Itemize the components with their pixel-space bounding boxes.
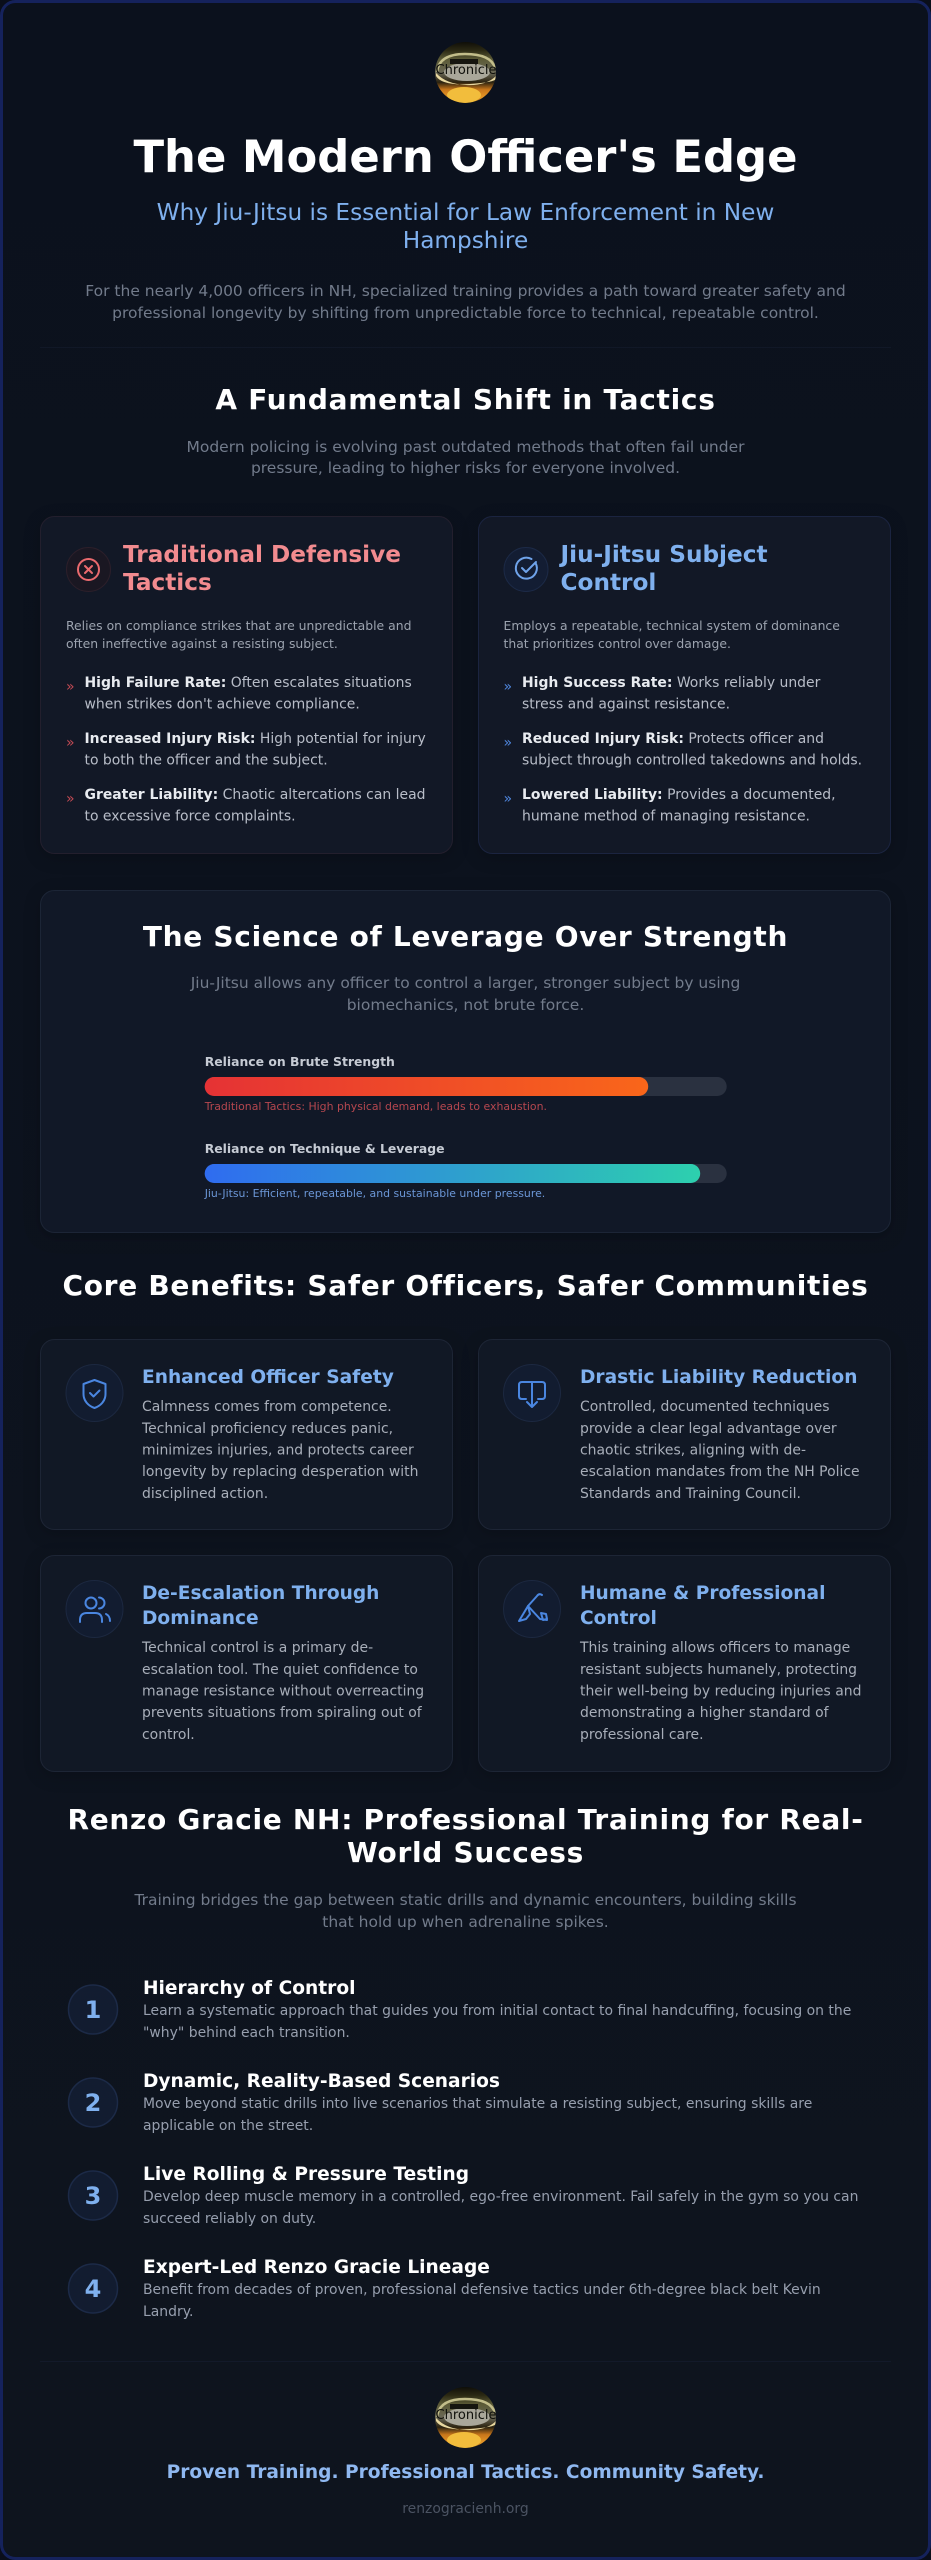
heading: core benefits: Core Benefits: Safer Officers, Safer Communities — [62, 1269, 868, 1302]
title: The Modern Officer's Edge — [134, 130, 797, 183]
card heading: Control — [560, 569, 656, 596]
benefit card: officer safety: longevity by replacing desperation with — [142, 1464, 418, 1480]
step 4: Benefit from decades of proven, professional defensive tactics under 6th-degree black belt Kevin — [143, 2282, 821, 2298]
step 3 — [68, 2164, 858, 2227]
benefit card: liability reduction — [478, 1340, 890, 1530]
benefit card: de-escalation: Dominance — [142, 1608, 259, 1629]
logo: footer: Chronicle — [436, 2408, 496, 2423]
step 1: Hierarchy of Control — [143, 1978, 356, 1999]
step 2 — [68, 2071, 812, 2134]
bullet list: » — [504, 791, 512, 807]
intro text: professional longevity by shifting from unpredictable force to technical, repeatable control. — [112, 304, 819, 322]
icon: check circle — [504, 548, 548, 592]
benefit card: liability reduction: chaotic strikes, aligning with de- — [580, 1442, 806, 1458]
icon: hand — [504, 1580, 560, 1638]
footer tagline: Proven Training. Professional Tactics. Community Safety. — [167, 2462, 764, 2483]
logo: header: Chronicle — [436, 63, 496, 78]
section intro: shift — [186, 438, 745, 477]
step 1 — [68, 1978, 851, 2041]
step 2: Dynamic, Reality-Based Scenarios — [143, 2071, 500, 2092]
card description: often ineffective against a resisting subject. — [66, 636, 338, 651]
panel: traditional defensive tactics — [40, 516, 452, 854]
benefit card: humane control — [478, 1556, 890, 1772]
section intro: shift: pressure, leading to higher risks for everyone involved. — [251, 459, 680, 477]
benefit card: humane control: demonstrating a higher standard of — [580, 1705, 830, 1721]
bullet list: to both the officer and the subject. — [84, 752, 328, 768]
subtitle: Hampshire — [403, 227, 528, 254]
step 2: Move beyond static drills into live scenarios that simulate a resisting subject, ensuring skills are — [143, 2096, 812, 2112]
section intro: shift: Modern policing is evolving past outdated methods that often fail under — [186, 438, 745, 456]
section intro: training: Training bridges the gap between static drills and dynamic encounters, building skills — [133, 1891, 797, 1909]
bar chart: technique and leverage: Reliance on Technique & Leverage — [205, 1141, 445, 1156]
card description: Employs a repeatable, technical system of dominance — [504, 618, 840, 633]
benefit card: liability reduction: provide a clear legal advantage over — [580, 1421, 837, 1437]
benefit card: liability reduction: Drastic Liability Reduction — [580, 1367, 857, 1388]
card heading: Tactics — [123, 569, 212, 596]
benefit card: humane control: Humane & Professional — [580, 1583, 825, 1604]
benefit card: liability reduction: Standards and Training Council. — [580, 1486, 801, 1502]
section intro: training: that hold up when adrenaline spikes. — [322, 1913, 609, 1931]
benefit card: de-escalation — [40, 1556, 452, 1772]
bullet list: » — [66, 791, 75, 807]
step 2: applicable on the street. — [143, 2118, 313, 2134]
step 3: 3 — [85, 2182, 101, 2210]
step 4: Expert-Led Renzo Gracie Lineage — [143, 2257, 490, 2278]
bar chart: technique and leverage: Jiu-Jitsu: Efficient, repeatable, and sustainable under pressure. — [204, 1187, 545, 1200]
heading: The Science of Leverage Over Strength — [143, 920, 788, 953]
bullet list: stress and against resistance. — [522, 696, 730, 712]
bullet list: subject through controlled takedowns and holds. — [522, 752, 862, 768]
icon: shield check — [66, 1364, 123, 1422]
step 4: 4 — [85, 2275, 101, 2303]
card description: that prioritizes control over damage. — [504, 636, 731, 651]
bullet list: » — [504, 679, 512, 695]
bullet list: humane method of managing resistance. — [522, 808, 810, 824]
card heading — [558, 541, 768, 596]
bullet list — [66, 675, 426, 824]
bullet list: High Failure Rate: Often escalates situations — [84, 675, 412, 691]
subtitle: Why Jiu-Jitsu is Essential for Law Enforcement in New — [157, 199, 774, 226]
card heading: Traditional Defensive — [123, 541, 401, 568]
step 1: 1 — [85, 1996, 101, 2024]
benefit card: de-escalation: escalation tool. The quiet confidence to — [142, 1662, 418, 1678]
section intro: biomechanics, not brute force. — [347, 996, 584, 1014]
heading: training: World Success — [347, 1836, 584, 1869]
heading: fundamental shift: A Fundamental Shift in Tactics — [215, 383, 716, 416]
card heading — [123, 541, 401, 596]
panel: jiu-jitsu subject control — [478, 516, 890, 854]
benefit card: officer safety: Calmness comes from competence. — [142, 1399, 392, 1415]
logo: header — [435, 42, 496, 103]
benefit card: officer safety: Enhanced Officer Safety — [142, 1367, 394, 1388]
benefit card: liability reduction: Controlled, documented techniques — [580, 1399, 829, 1415]
card description: Relies on compliance strikes that are unpredictable and — [66, 618, 411, 633]
card heading: Jiu-Jitsu Subject — [558, 541, 768, 568]
heading: training — [67, 1803, 864, 1869]
bullet list: Lowered Liability: Provides a documented, — [522, 787, 836, 803]
step 4: Landry. — [143, 2304, 193, 2320]
icon: book down — [504, 1364, 560, 1422]
benefit card: humane control: Control — [580, 1608, 657, 1629]
benefit card: humane control: professional care. — [580, 1727, 704, 1743]
bullet list: » — [504, 735, 512, 751]
step 1: Learn a systematic approach that guides you from initial contact to final handcuffing, focusing on the — [143, 2003, 851, 2019]
benefit card: de-escalation: Technical control is a primary de- — [141, 1640, 373, 1656]
subtitle — [157, 199, 774, 254]
bullet list: » — [66, 735, 75, 751]
benefit card: de-escalation: De-Escalation Through — [142, 1583, 379, 1604]
icon: users — [66, 1580, 123, 1638]
intro text: For the nearly 4,000 officers in NH, specialized training provides a path toward greater safety and — [85, 282, 846, 300]
bullet list: Reduced Injury Risk: Protects officer and — [522, 731, 824, 747]
card description — [66, 618, 411, 651]
footer website: renzogracienh.org — [402, 2501, 529, 2517]
bar chart: brute strength — [204, 1054, 727, 1113]
benefit card: de-escalation: manage resistance without overreacting — [142, 1684, 424, 1700]
step 3: Develop deep muscle memory in a controlled, ego-free environment. Fail safely in the gym so you can — [143, 2189, 858, 2205]
bullet list: Increased Injury Risk: High potential for injury — [84, 731, 426, 747]
heading: training: Renzo Gracie NH: Professional Training for Real- — [67, 1803, 864, 1836]
section intro: training — [133, 1891, 797, 1931]
benefit card: liability reduction: escalation mandates from the NH Police — [580, 1464, 860, 1480]
panel: science of leverage — [40, 890, 890, 1232]
step 3: succeed reliably on duty. — [143, 2211, 316, 2227]
bullet list: when strikes don't achieve compliance. — [84, 696, 360, 712]
step 1: "why" behind each transition. — [143, 2025, 350, 2041]
bullet list — [504, 675, 862, 824]
intro text — [85, 282, 846, 322]
benefit card: officer safety: disciplined action. — [142, 1486, 268, 1502]
benefit card: humane control: This training allows officers to manage — [579, 1640, 850, 1656]
benefit card: officer safety: minimizes injuries, and protects career — [142, 1442, 414, 1458]
step 2: 2 — [85, 2089, 101, 2117]
step 3: Live Rolling & Pressure Testing — [143, 2164, 469, 2185]
benefit card: officer safety — [40, 1340, 452, 1530]
bullet list: » — [66, 679, 75, 695]
section intro: Jiu-Jitsu allows any officer to control a larger, stronger subject by using — [190, 974, 740, 992]
bullet list: to excessive force complaints. — [84, 808, 296, 824]
bullet list: Greater Liability: Chaotic altercations can lead — [84, 787, 425, 803]
bar chart: brute strength: Reliance on Brute Strength — [205, 1054, 395, 1069]
benefit card: de-escalation: prevents situations from spiraling out of — [142, 1705, 423, 1721]
section intro — [190, 974, 740, 1014]
card description — [504, 618, 840, 651]
benefit card: humane control: resistant subjects humanely, protecting — [580, 1662, 857, 1678]
bullet list: High Success Rate: Works reliably under — [522, 675, 821, 691]
step 4 — [68, 2257, 821, 2320]
benefit card: de-escalation: control. — [142, 1727, 195, 1743]
bar chart: technique and leverage — [204, 1141, 727, 1200]
bar chart: brute strength: Traditional Tactics: High physical demand, leads to exhaustion. — [204, 1100, 547, 1113]
benefit card: humane control: their well-being by reducing injuries and — [580, 1684, 861, 1700]
benefit card: officer safety: Technical proficiency reduces panic, — [141, 1421, 393, 1437]
logo: footer — [435, 2387, 496, 2448]
icon: x circle — [66, 548, 110, 592]
